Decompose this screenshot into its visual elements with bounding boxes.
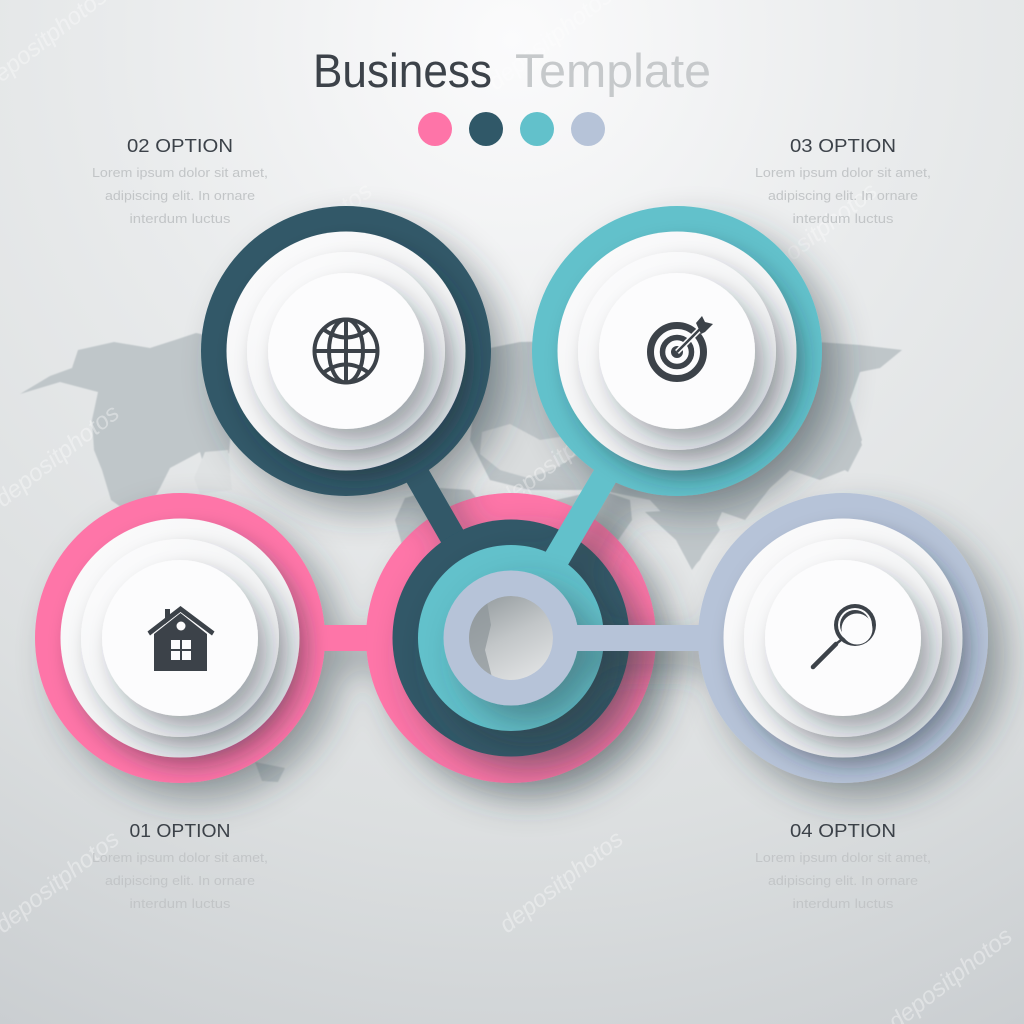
text block: 03 option: 03 OPTION: [790, 135, 896, 156]
text block: 01 option: 01 OPTION: [130, 820, 230, 841]
text block: 02 option: adipiscing elit. In ornare: [105, 188, 255, 203]
text block: 01 option: adipiscing elit. In ornare: [105, 873, 255, 888]
text block: 04 option: Lorem ipsum dolor sit amet,: [755, 850, 931, 865]
white stacked discs: option 03: [558, 232, 796, 470]
hub hole showing map behind: [469, 596, 553, 680]
icon: globe: [314, 320, 378, 382]
title: Business: [313, 44, 492, 97]
watermark: depositphotos: [243, 177, 378, 291]
watermark: depositphotos: [748, 177, 883, 291]
world map: [20, 330, 902, 782]
text block: 04 option: adipiscing elit. In ornare: [768, 873, 918, 888]
text block: 02 option: interdum luctus: [130, 211, 231, 226]
white stacked discs: option 02: [226, 232, 466, 470]
text block: 04 option: [755, 820, 931, 911]
colour legend dots: [418, 112, 605, 146]
text block: 04 option: 04 OPTION: [790, 820, 896, 841]
text block: 01 option: interdum luctus: [130, 896, 231, 911]
text block: 03 option: interdum luctus: [792, 211, 894, 226]
pink network: option 01 ring, connector and hub ring: [35, 493, 656, 783]
text block: 02 option: [92, 135, 268, 226]
teal network: option 03 ring, connector and hub ring: [418, 206, 822, 731]
text block: 01 option: Lorem ipsum dolor sit amet,: [92, 850, 268, 865]
grey network: option 04 ring, connector and hub ring: [444, 493, 988, 783]
watermark: depositphotos: [494, 399, 629, 513]
white stacked discs: option 04: [724, 518, 962, 758]
navy network: option 02 ring, connector and hub ring: [201, 206, 630, 756]
text block: 03 option: [755, 135, 931, 226]
text block: 01 option: [92, 820, 268, 911]
text block: 04 option: interdum luctus: [792, 896, 894, 911]
title: [313, 44, 711, 97]
icon: house: [148, 606, 214, 671]
text block: 03 option: adipiscing elit. In ornare: [768, 188, 918, 203]
title: Template: [515, 44, 711, 97]
text block: 03 option: Lorem ipsum dolor sit amet,: [755, 165, 931, 180]
icon: target with arrow: [650, 316, 713, 378]
white stacked discs: option 01: [60, 518, 300, 758]
text block: 02 option: 02 OPTION: [127, 135, 233, 156]
watermark: depositphotos: [494, 825, 629, 939]
icon: magnifier: [813, 604, 876, 667]
text block: 02 option: Lorem ipsum dolor sit amet,: [92, 165, 268, 180]
